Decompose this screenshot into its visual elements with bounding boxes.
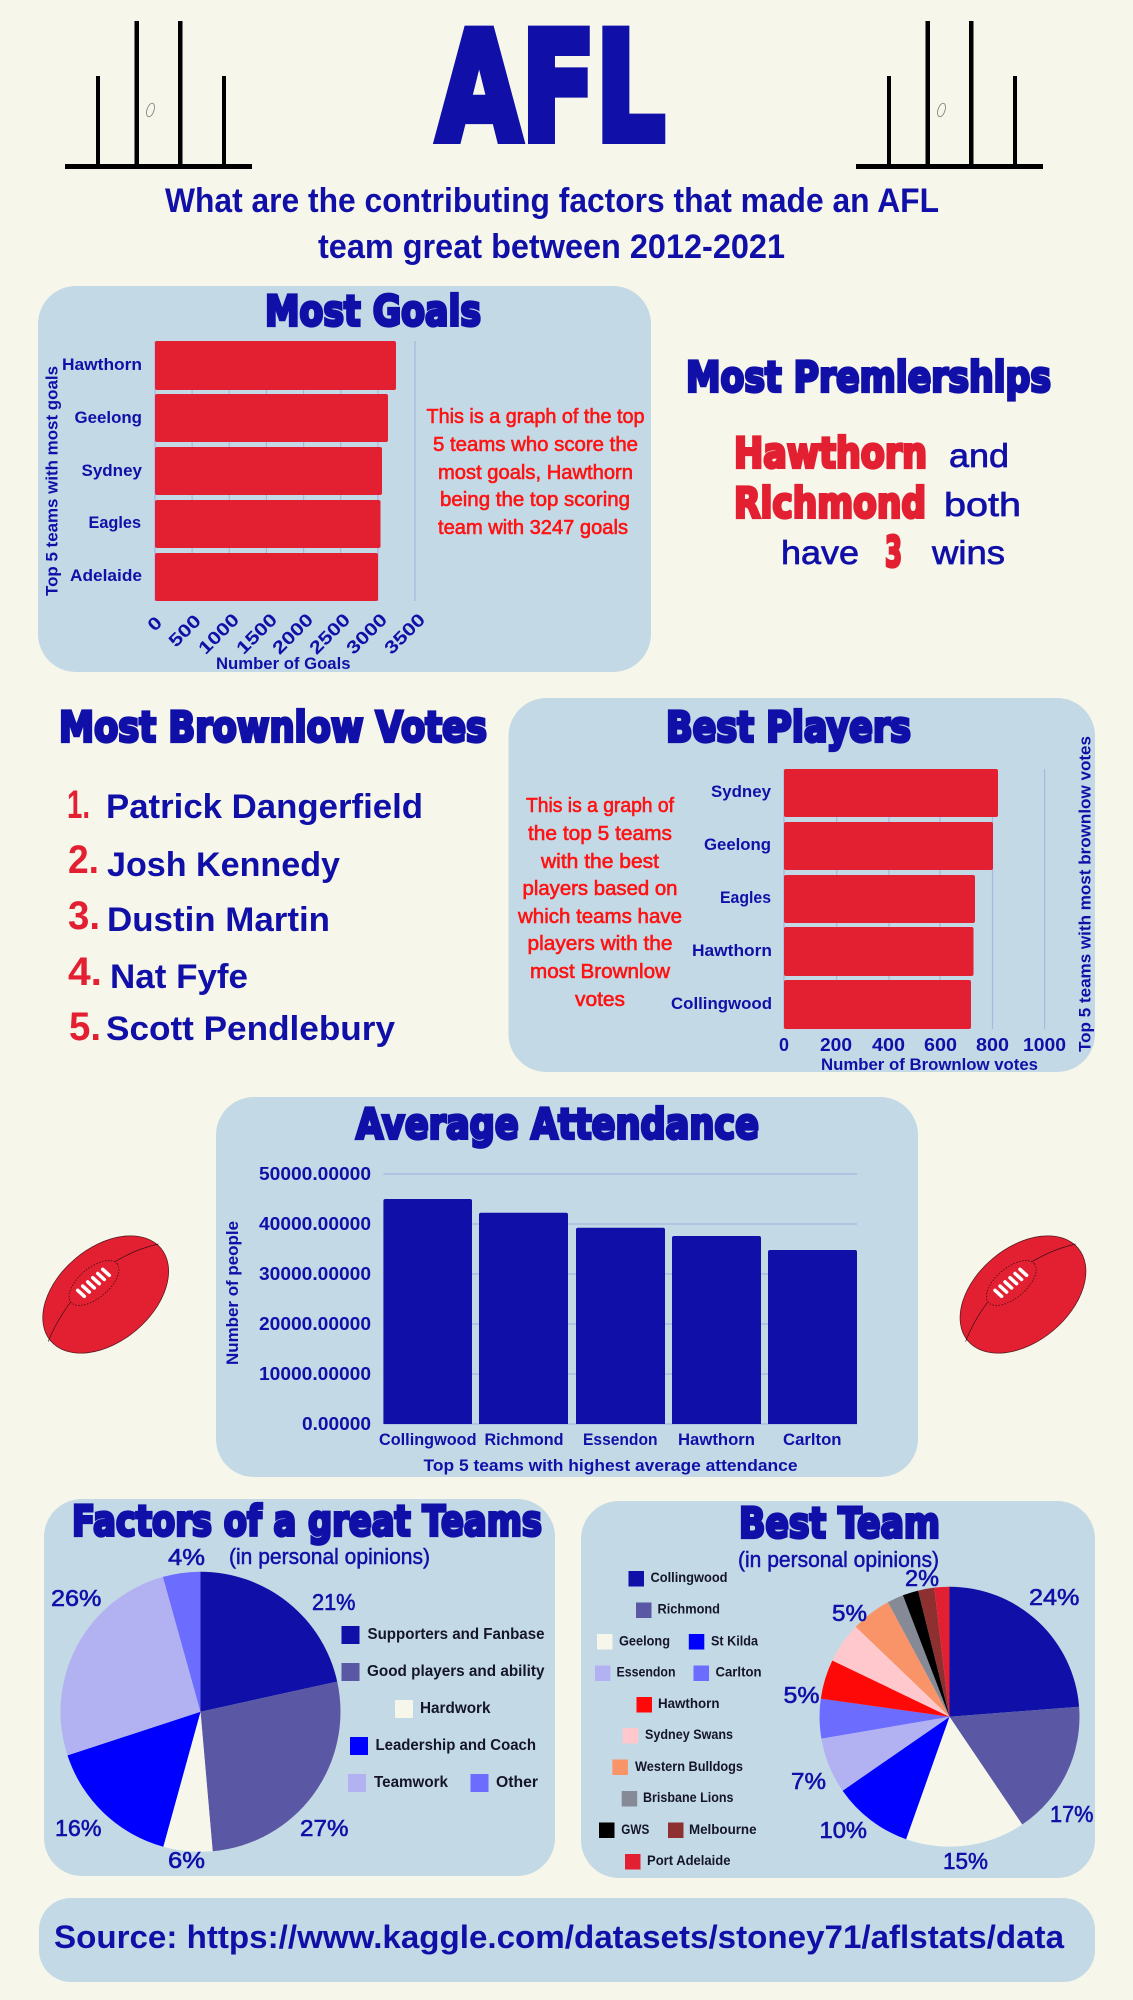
pie chart: best team: 24% bbox=[1029, 1584, 1080, 1610]
bar chart: goals: Eagles bbox=[88, 514, 141, 532]
legend: best team: St Kilda bbox=[711, 1632, 758, 1648]
bar chart: goals: Adelaide bbox=[70, 567, 142, 585]
bar chart: brownlow votes: Eagles bbox=[720, 889, 771, 907]
heading: average attendance: Average Attendance bbox=[356, 1100, 759, 1148]
icon: right football bbox=[938, 1212, 1108, 1377]
legend: best team: Collingwood bbox=[650, 1569, 728, 1585]
bar chart: brownlow votes: Collingwood bbox=[671, 995, 772, 1013]
text block: players description: players based on bbox=[522, 877, 678, 900]
pie chart: factors: 4% bbox=[168, 1544, 205, 1570]
bar chart: goals: 2000 bbox=[268, 609, 317, 658]
ranked list of players: Scott Pendlebury bbox=[106, 1010, 395, 1048]
bar chart: goals: 1500 bbox=[232, 609, 281, 658]
pie chart: best team: 17% bbox=[1050, 1801, 1094, 1827]
bar chart: goals: 3500 bbox=[380, 609, 429, 658]
ranked list of players: 2. bbox=[68, 838, 99, 882]
bar chart: brownlow votes: 0 bbox=[779, 1035, 789, 1055]
pie chart: factors: 6% bbox=[168, 1847, 205, 1873]
bar chart: brownlow votes: Top 5 teams with most brownlow votes bbox=[1076, 736, 1094, 1052]
heading: most brownlow votes: Most Brownlow Votes bbox=[59, 702, 487, 752]
pie chart: best team: 10% bbox=[820, 1817, 867, 1843]
legend: factors: Supporters and Fanbase bbox=[368, 1626, 545, 1643]
legend: best team: GWS bbox=[621, 1821, 649, 1837]
legend: best team: Geelong bbox=[619, 1632, 670, 1648]
text block: goals description bbox=[426, 405, 644, 539]
text block: premiership winners bbox=[734, 428, 1021, 576]
icon: left football bbox=[20, 1212, 191, 1377]
text block: premiership winners: 3 bbox=[885, 528, 902, 576]
pie chart: factors: 26% bbox=[51, 1585, 102, 1611]
text block: premiership winners: both bbox=[944, 486, 1021, 523]
ranked list of players: Dustin Martin bbox=[107, 901, 330, 939]
pie chart: best team: 7% bbox=[791, 1768, 826, 1794]
pie chart: factors: 16% bbox=[55, 1815, 102, 1841]
legend: factors: Hardwork bbox=[420, 1700, 491, 1717]
panel: best team bbox=[581, 1498, 1095, 1878]
bar chart: attendance: 50000.00000 bbox=[259, 1164, 371, 1184]
bar chart: brownlow votes: 600 bbox=[924, 1035, 957, 1055]
bar chart: attendance: Number of people bbox=[224, 1221, 242, 1365]
text block: players description: This is a graph of bbox=[526, 794, 674, 817]
text block: goals description: team with 3247 goals bbox=[438, 516, 628, 539]
legend: best team: Richmond bbox=[658, 1600, 720, 1616]
legend: best team: Carlton bbox=[716, 1664, 762, 1680]
subtitle: What are the contributing factors that made an AFL bbox=[165, 182, 939, 220]
text block: players description bbox=[517, 794, 682, 1011]
bar chart: attendance: Carlton bbox=[783, 1431, 842, 1449]
legend: best team bbox=[595, 1569, 762, 1870]
heading: most premierships: Most Premierships bbox=[686, 352, 1051, 402]
heading: best team: Best Team bbox=[739, 1498, 940, 1548]
bar chart: brownlow votes: Sydney bbox=[711, 783, 772, 801]
bar chart: attendance: 40000.00000 bbox=[259, 1214, 371, 1234]
panel: source bbox=[39, 1898, 1095, 1982]
ranked list of players: 3. bbox=[68, 894, 100, 938]
bar chart: goals: Sydney bbox=[82, 462, 143, 480]
bar chart: brownlow votes bbox=[671, 736, 1094, 1074]
bar chart: goals: 500 bbox=[165, 611, 205, 651]
bar chart: goals: 2500 bbox=[305, 609, 354, 658]
text block: premiership winners: Richmond bbox=[734, 478, 926, 528]
text block: players description: with the best bbox=[540, 850, 659, 873]
ranked list of players: 1. bbox=[67, 783, 90, 827]
bar chart: brownlow votes: Hawthorn bbox=[692, 942, 772, 960]
bar chart: attendance bbox=[224, 1164, 857, 1475]
bar chart: attendance: 10000.00000 bbox=[259, 1364, 371, 1384]
bar chart: attendance: Essendon bbox=[583, 1431, 658, 1449]
title: AFL bbox=[437, 2, 665, 176]
legend: best team: Essendon bbox=[616, 1664, 676, 1680]
panel: most brownlow votes bbox=[59, 702, 487, 1049]
pie chart: factors: 21% bbox=[312, 1589, 356, 1615]
ranked list of players: Nat Fyfe bbox=[110, 958, 248, 996]
bar chart: goals: 0 bbox=[143, 612, 166, 635]
heading: best players: Best Players bbox=[666, 702, 911, 752]
subheading: personal opinions: (in personal opinions) bbox=[738, 1547, 939, 1572]
text block: goals description: most goals, Hawthorn bbox=[438, 461, 633, 484]
source citation: Source: https://www.kaggle.com/datasets/stoney71/aflstats/data bbox=[54, 1919, 1064, 1955]
text block: premiership winners: and bbox=[949, 437, 1009, 474]
bar chart: goals bbox=[44, 341, 429, 673]
text block: players description: which teams have bbox=[517, 905, 682, 928]
bar chart: brownlow votes: 800 bbox=[976, 1035, 1009, 1055]
text block: premiership winners: wins bbox=[931, 534, 1005, 571]
ranked list of players: Patrick Dangerfield bbox=[106, 788, 423, 826]
subheading: personal opinions: (in personal opinions) bbox=[229, 1544, 430, 1569]
pie chart: factors bbox=[51, 1544, 356, 1873]
text block: goals description: 5 teams who score the bbox=[433, 433, 638, 456]
ranked list of players: 4. bbox=[68, 950, 102, 994]
subtitle: team great between 2012-2021 bbox=[318, 228, 785, 266]
bar chart: attendance: Hawthorn bbox=[678, 1431, 755, 1449]
bar chart: goals: Top 5 teams with most goals bbox=[44, 366, 62, 596]
text block: players description: most Brownlow bbox=[530, 960, 670, 983]
panel: most goals bbox=[38, 286, 651, 673]
panel: best players bbox=[508, 698, 1095, 1074]
legend: best team: Brisbane Lions bbox=[643, 1789, 734, 1805]
text block: players description: votes bbox=[575, 988, 625, 1011]
panel: most premierships bbox=[686, 352, 1051, 576]
pie chart: best team: 5% bbox=[784, 1682, 820, 1708]
icon: right goal posts bbox=[856, 21, 1043, 169]
ranked list of players bbox=[67, 783, 423, 1049]
pie chart: best team: 5% bbox=[832, 1600, 867, 1626]
pie chart: factors: 27% bbox=[300, 1815, 348, 1841]
bar chart: attendance: Top 5 teams with highest average attendance bbox=[424, 1457, 798, 1475]
bar chart: attendance: 0.00000 bbox=[302, 1414, 371, 1434]
pie chart: best team bbox=[784, 1565, 1094, 1874]
legend: best team: Port Adelaide bbox=[647, 1852, 731, 1868]
bar chart: brownlow votes: 1000 bbox=[1023, 1035, 1066, 1055]
text block: goals description: being the top scoring bbox=[440, 488, 630, 511]
legend: best team: Sydney Swans bbox=[645, 1726, 733, 1742]
bar chart: goals: Number of Goals bbox=[216, 655, 350, 673]
bar chart: attendance: 20000.00000 bbox=[259, 1314, 371, 1334]
legend: factors: Other bbox=[496, 1774, 538, 1791]
heading: most goals: Most Goals bbox=[265, 286, 481, 336]
text block: premiership winners: have bbox=[781, 534, 859, 571]
bar chart: goals: 1000 bbox=[194, 609, 243, 658]
ranked list of players: Josh Kennedy bbox=[107, 846, 340, 884]
bar chart: brownlow votes: Geelong bbox=[704, 836, 771, 854]
text block: goals description: This is a graph of the top bbox=[426, 405, 644, 428]
legend: factors bbox=[342, 1626, 545, 1792]
bar chart: brownlow votes: Number of Brownlow votes bbox=[821, 1056, 1038, 1074]
legend: factors: Teamwork bbox=[374, 1774, 448, 1791]
legend: factors: Leadership and Coach bbox=[376, 1737, 536, 1754]
text block: players description: players with the bbox=[528, 932, 672, 955]
bar chart: brownlow votes: 200 bbox=[820, 1035, 852, 1055]
heading: factors of a great teams: Factors of a great Teams bbox=[72, 1496, 542, 1546]
bar chart: goals: Geelong bbox=[74, 409, 142, 427]
pie chart: best team: 2% bbox=[905, 1565, 939, 1591]
text block: premiership winners: Hawthorn bbox=[734, 428, 927, 478]
bar chart: brownlow votes: 400 bbox=[872, 1035, 905, 1055]
subtitle bbox=[165, 182, 939, 266]
legend: best team: Melbourne bbox=[689, 1821, 757, 1837]
panel: factors of a great team bbox=[44, 1496, 555, 1876]
legend: best team: Hawthorn bbox=[658, 1695, 720, 1711]
bar chart: goals: 3000 bbox=[342, 609, 391, 658]
text block: players description: the top 5 teams bbox=[528, 822, 672, 845]
bar chart: attendance: Collingwood bbox=[379, 1431, 476, 1449]
bar chart: attendance: 30000.00000 bbox=[259, 1264, 371, 1284]
bar chart: goals: Hawthorn bbox=[62, 356, 142, 374]
legend: best team: Western Bulldogs bbox=[635, 1758, 743, 1774]
ranked list of players: 5. bbox=[69, 1005, 101, 1049]
legend: factors: Good players and ability bbox=[367, 1663, 545, 1680]
panel: average attendance bbox=[216, 1097, 918, 1477]
pie chart: best team: 15% bbox=[943, 1848, 988, 1874]
bar chart: attendance: Richmond bbox=[484, 1431, 564, 1449]
icon: left goal posts bbox=[65, 21, 252, 169]
